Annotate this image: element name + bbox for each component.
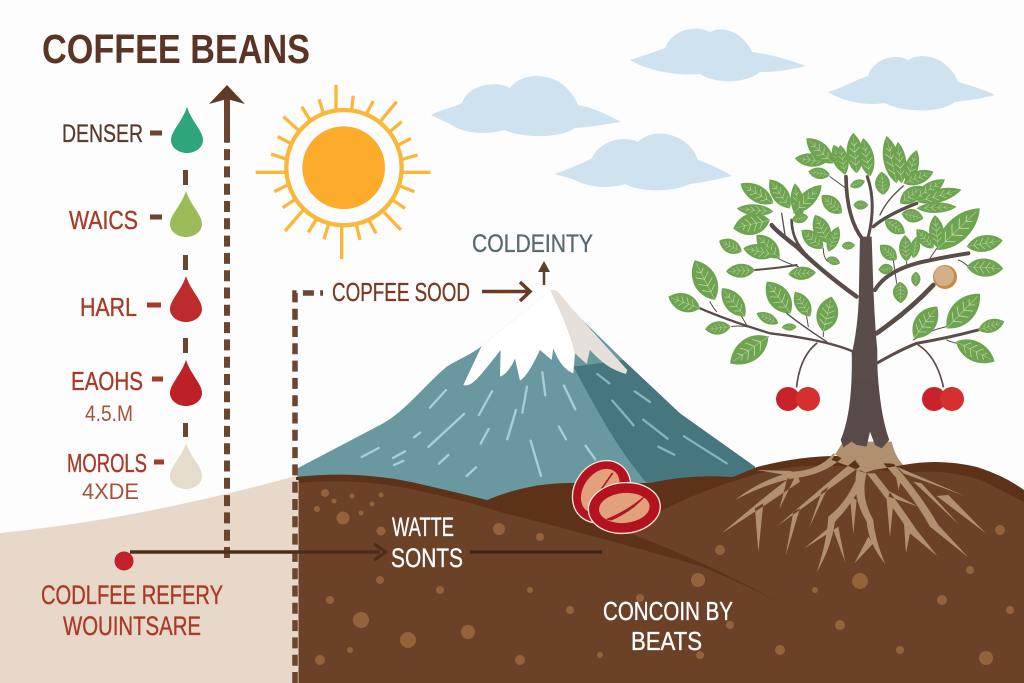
label: copfee sood: COPFEE SOOD <box>332 277 470 307</box>
mountain <box>297 290 755 503</box>
dashed line: to coffee seed label <box>295 293 323 683</box>
legend item: harl <box>80 276 202 322</box>
line: sonts connector <box>470 550 602 554</box>
legend item: eaohs <box>71 360 202 426</box>
legend item: eaohs: 4.5.M <box>85 401 133 426</box>
trunk <box>841 350 889 448</box>
legend: drops <box>62 107 203 504</box>
legend item: morols: 4XDE <box>82 479 139 504</box>
legend item: denser: DENSER <box>62 120 143 148</box>
branches and leaves <box>665 132 1006 387</box>
label: coffee refery: WOUINTSARE <box>63 611 201 641</box>
legend item: waics <box>69 191 202 237</box>
label: coldeinty: COLDEINTY <box>472 230 593 258</box>
panel: soil <box>296 456 1024 683</box>
dashed arrow: vertical up <box>209 85 245 558</box>
arrow: red dot to watte sonts <box>114 544 386 570</box>
icon: sun <box>256 85 431 259</box>
label: coffee refery <box>41 580 223 641</box>
tree <box>665 132 1006 572</box>
roots <box>722 442 986 572</box>
label: concoin by beats <box>603 596 733 656</box>
label: coffee refery: CODLFEE REFERY <box>41 580 223 610</box>
legend item: harl: HARL <box>80 292 137 322</box>
label: coldeinty <box>472 230 593 285</box>
label: watte: WATTE <box>392 512 454 542</box>
label: concoin by beats: CONCOIN BY <box>603 596 733 626</box>
icon: coffee beans <box>561 449 662 536</box>
title: COFFEE BEANS <box>42 26 310 72</box>
legend item: morols: MOROLS <box>67 448 147 478</box>
legend item: waics: WAICS <box>69 205 138 235</box>
legend item: morols <box>67 443 202 504</box>
legend item: denser <box>62 107 203 153</box>
acorn seed <box>933 265 957 289</box>
clouds <box>431 29 995 190</box>
panel: left pale ground <box>0 476 296 683</box>
label: sonts: SONTS <box>391 543 463 573</box>
legend item: eaohs: EAOHS <box>71 366 143 396</box>
label: concoin by beats: BEATS <box>631 626 702 656</box>
cherries <box>776 387 964 411</box>
